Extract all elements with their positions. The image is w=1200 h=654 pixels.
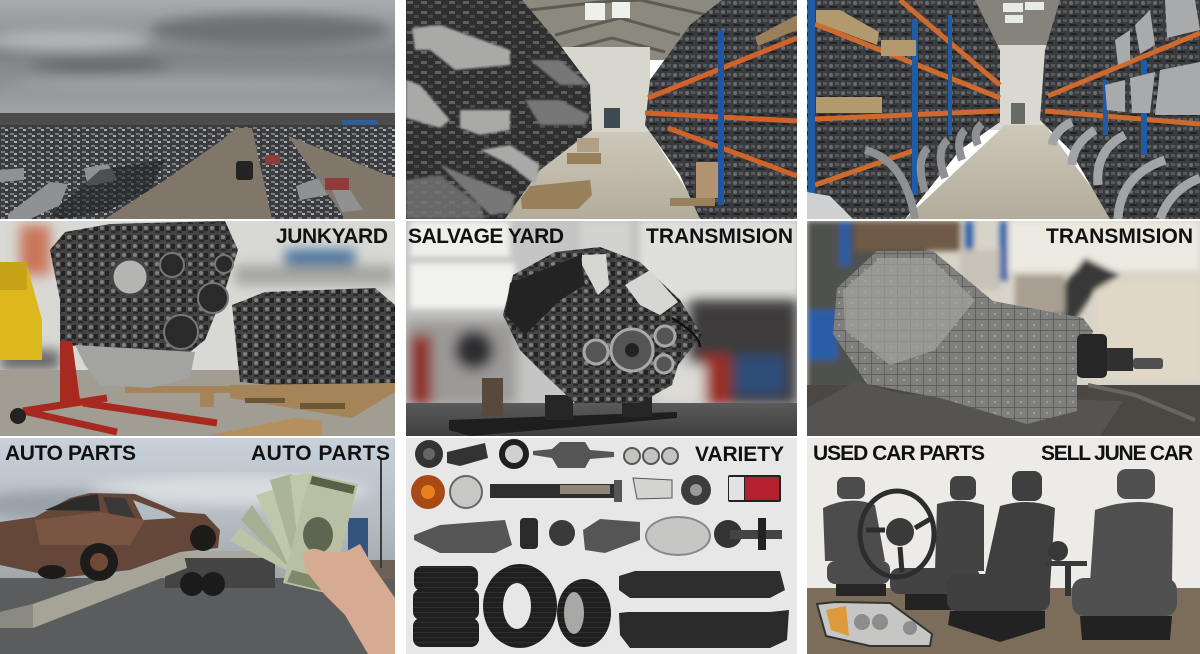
rusted car (0, 493, 220, 581)
blue upright (718, 30, 724, 205)
oil pan (75, 345, 195, 388)
seat 4 (1072, 469, 1177, 640)
label: variety: VARIETY (695, 443, 784, 466)
panel: junkyard engines (0, 221, 395, 436)
truck flatbed (165, 518, 368, 596)
dark intake manifold (505, 255, 585, 335)
white covers (582, 254, 609, 295)
black car on road (236, 161, 253, 180)
pole (380, 458, 382, 568)
foreground silver cars (0, 164, 363, 219)
stacked car shells (406, 0, 592, 219)
panel: salvage warehouse with car shells (406, 0, 797, 219)
panel: warehouse parts shelving (807, 0, 1200, 219)
front left silver panel (807, 192, 853, 219)
orange beams (645, 38, 797, 176)
alternator (112, 259, 148, 295)
back wall (990, 45, 1055, 130)
white shell pieces (406, 25, 540, 185)
second row parts (411, 475, 781, 509)
steel plate (807, 381, 1123, 436)
cardboard boxes (696, 162, 718, 198)
tool rod (1088, 385, 1195, 420)
seat 3 (947, 471, 1055, 642)
pallet (125, 383, 395, 418)
label: used car parts: USED CAR PARTS (813, 442, 985, 465)
steering wheel (860, 491, 934, 577)
red engine hoist (23, 341, 217, 432)
right fenders (1052, 122, 1200, 219)
panel: used seats and steering wheel (807, 438, 1200, 654)
left racking (807, 0, 1000, 219)
floor (500, 132, 705, 219)
label: auto parts left: AUTO PARTS (5, 442, 136, 465)
panel: transmission on plate (807, 221, 1200, 436)
left fenders row (865, 124, 982, 219)
large tire (483, 564, 557, 648)
dirt field right (288, 136, 395, 219)
floor (905, 125, 1115, 219)
label: auto parts right: AUTO PARTS (251, 442, 390, 465)
far right car rows and left lot (0, 125, 395, 219)
engine pulleys (584, 326, 675, 373)
label: transmision center: TRANSMISION (646, 225, 793, 248)
third row parts (414, 517, 782, 555)
engine (503, 247, 702, 403)
rear engine (232, 288, 395, 392)
right racking (1040, 0, 1200, 219)
tire stack (413, 566, 479, 647)
base plate (449, 412, 677, 436)
yellow machine (0, 262, 42, 360)
panel: engine on stand (406, 221, 797, 436)
bell housing shade (843, 258, 975, 365)
hand (303, 544, 395, 654)
panel: selling a wrecked car (0, 438, 395, 654)
ramp (0, 551, 187, 628)
panel: aerial junkyard photo (0, 0, 395, 219)
back wall (560, 47, 650, 137)
label: transmision right: TRANSMISION (1046, 225, 1193, 248)
wooden pallets (521, 15, 797, 209)
label: salvage yard: SALVAGE YARD (408, 225, 564, 248)
seat 2 (890, 476, 984, 610)
output shaft (1077, 334, 1163, 378)
transmission body (833, 251, 1093, 424)
headlight (817, 602, 932, 646)
wood planks (205, 418, 322, 436)
dark wreck stack (50, 160, 165, 219)
ceiling (522, 0, 722, 60)
top row parts (415, 439, 678, 469)
bumpers (619, 571, 785, 598)
label: junkyard: JUNKYARD (276, 225, 388, 248)
small pedestal part (1045, 541, 1087, 596)
panel: variety of parts flat lay (406, 438, 797, 654)
front engine (50, 221, 238, 352)
wheel (557, 579, 611, 647)
fan of dollar bills (230, 473, 358, 594)
seat 1 (823, 477, 890, 596)
pulleys (160, 253, 233, 349)
dirt road (105, 128, 272, 219)
right racking (645, 0, 797, 219)
label: sell june car: SELL JUNE CAR (1041, 442, 1193, 465)
right silver panels (1105, 0, 1200, 115)
